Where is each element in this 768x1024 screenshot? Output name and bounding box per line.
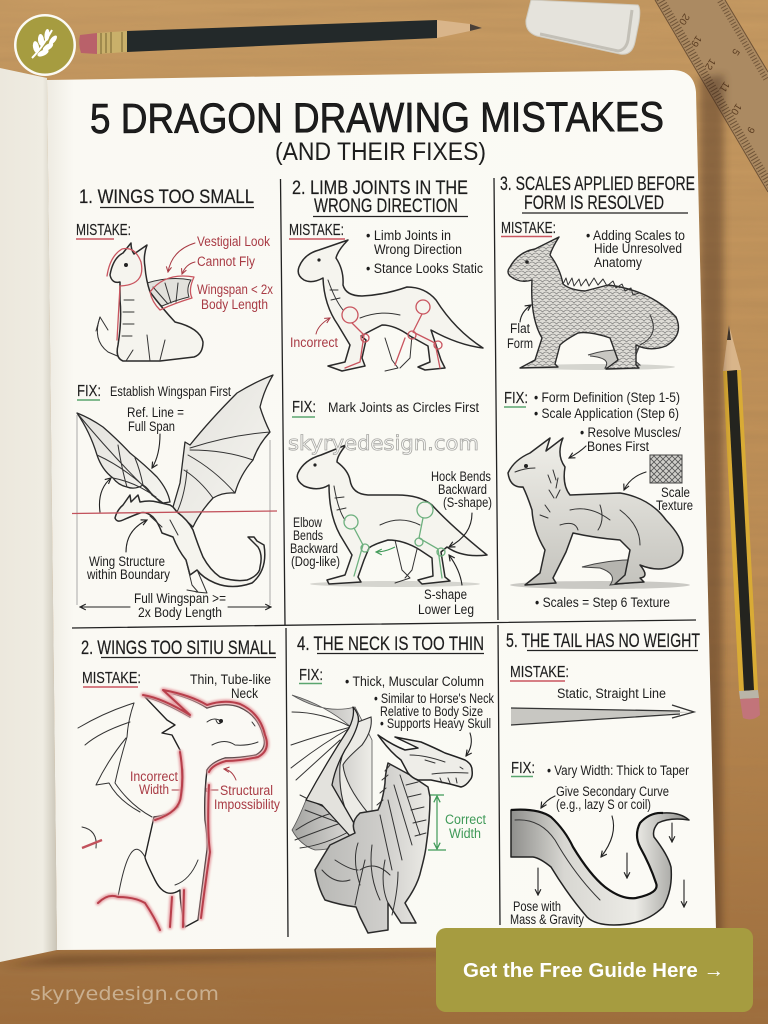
fix label: FIX: (511, 760, 535, 777)
fix labels (290, 400, 492, 617)
thin-neck dragon (78, 690, 267, 930)
fix bullets: • Thick, Muscular Column (345, 674, 484, 689)
mistake bullets: Flat (510, 321, 530, 336)
mistake bullets: Anatomy (594, 255, 642, 270)
ruler (655, 0, 768, 192)
scale texture swatch (650, 455, 682, 483)
ruler: 19 (688, 33, 703, 49)
flying dragon (72, 375, 277, 605)
fix bullets: (e.g., lazy S or coil) (556, 797, 651, 812)
fix label: FIX: (292, 399, 316, 416)
call to action button: Get the Free Guide Here → (463, 960, 724, 982)
neck labels: Thin, Tube-like (190, 672, 271, 687)
fix labels: Full Wingspan >= (134, 591, 226, 606)
neck labels: Width (139, 782, 169, 797)
panel: 2 fix (290, 399, 492, 617)
mistake label: MISTAKE: (510, 664, 569, 681)
fix labels: Backward (438, 482, 487, 497)
ruler: 5 (729, 46, 741, 57)
fix bullets: • Similar to Horse's Neck (374, 691, 494, 706)
correct width bracket (428, 795, 446, 850)
gravity arrows (538, 823, 684, 907)
heading: 5. THE TAIL HAS NO WEIGHT (506, 631, 700, 652)
mistake bullets: • Adding Scales to (586, 228, 685, 243)
heading: 2. LIMB JOINTS IN THE (292, 178, 468, 199)
eraser (526, 0, 640, 54)
red callouts (168, 234, 273, 312)
heading (292, 178, 468, 217)
side dragon with red joints (298, 240, 483, 371)
fix bullets: Pose with (513, 899, 561, 914)
fix labels: Lower Leg (418, 602, 474, 617)
panel: the tail has no weight (506, 631, 700, 927)
fix bullets: • Form Definition (Step 1-5) (534, 390, 680, 405)
panel: the neck is too thin (291, 634, 494, 933)
panel: 2 limb joints (289, 178, 483, 371)
heading: 2. WINGS TOO SITIU SMALL (81, 638, 276, 659)
fix bullets: • Scales = Step 6 Texture (535, 595, 670, 610)
mistake bullets: • Limb Joints in (366, 228, 451, 243)
red callouts: Vestigial Look (197, 234, 270, 249)
fix bullets: • Supports Heavy Skull (380, 716, 491, 731)
title: 5 DRAGON DRAWING MISTAKES (90, 93, 664, 142)
fix labels: (S-shape) (443, 495, 492, 510)
fix labels: S-shape (424, 587, 467, 602)
watermark: centre: skyryedesign.com (288, 431, 479, 455)
ruler: 12 (702, 56, 717, 72)
heading: WRONG DIRECTION (314, 196, 458, 217)
grid dividers (72, 178, 696, 937)
heading: 3. SCALES APPLIED BEFORE (500, 174, 695, 195)
neck labels: Neck (231, 686, 258, 701)
fix bullets (534, 390, 693, 610)
fix bullets (510, 763, 689, 927)
mistake bullets: Form (507, 336, 533, 351)
fix bullets: Correct (445, 812, 486, 827)
left wing (77, 413, 170, 503)
heading (500, 174, 695, 214)
mistake label: MISTAKE: (289, 222, 344, 239)
neck labels: Structural (220, 783, 273, 798)
fix label: FIX: (77, 383, 101, 400)
fix bullets: Mass & Gravity (510, 912, 584, 927)
fix labels: within Boundary (86, 567, 170, 582)
mistake bullets (507, 228, 685, 351)
subtitle: (AND THEIR FIXES) (275, 138, 486, 166)
wing membrane (291, 695, 372, 850)
fix labels: Elbow (293, 515, 322, 530)
fix labels: Wing Structure (89, 554, 165, 569)
red callouts: Wingspan < 2x (197, 282, 273, 297)
right wing (173, 375, 273, 527)
mistake bullets: • Stance Looks Static (366, 261, 483, 276)
ruler: 20 (676, 11, 691, 27)
panel: 3 scales (500, 174, 695, 370)
side dragon with green joints (297, 445, 487, 587)
red callouts: Cannot Fly (197, 254, 255, 269)
mistake bullets: Hide Unresolved (594, 241, 682, 256)
fix bullets: • Resolve Muscles/ (580, 425, 681, 440)
left notebook sheet (0, 68, 57, 962)
head (378, 735, 472, 787)
mistake label: MISTAKE: (76, 222, 131, 239)
fix labels: Mark Joints as Circles First (328, 400, 479, 415)
panel: 1 fix (72, 375, 277, 620)
fix bullets: Scale (661, 485, 690, 500)
watermark: bottom: skyryedesign.com (30, 983, 219, 1005)
fix label: FIX: (299, 667, 323, 684)
mistake bullets: Incorrect (290, 335, 338, 350)
S-curve tail (511, 810, 689, 925)
fix label: FIX: (504, 390, 528, 407)
pencil: right (723, 325, 760, 719)
heading: 1. WINGS TOO SMALL (79, 187, 254, 208)
static label: Static, Straight Line (557, 686, 666, 701)
arrows (80, 434, 271, 607)
muscular neck dragon (291, 695, 472, 933)
fix bullets: Width (449, 826, 481, 841)
fix labels: (Dog-like) (291, 554, 340, 569)
panel: wings too small (lower) (78, 638, 280, 930)
neck labels (130, 672, 280, 812)
ruler: 11 (716, 79, 731, 94)
sitting dragon (96, 243, 203, 361)
fix labels (86, 384, 231, 620)
fix bullets: Bones First (587, 439, 649, 454)
mistake label: MISTAKE: (501, 220, 556, 237)
heading: FORM IS RESOLVED (524, 193, 664, 214)
fix bullets: Give Secondary Curve (556, 784, 669, 799)
fix labels: Ref. Line = (127, 405, 184, 420)
panel: 3 fix (504, 390, 693, 610)
fix bullets: Texture (656, 498, 693, 513)
mistake bullets: Wrong Direction (374, 242, 462, 257)
fix labels: 2x Body Length (138, 605, 222, 620)
fix bullets (345, 674, 494, 841)
fix bullets: • Scale Application (Step 6) (534, 406, 679, 421)
fix bullets: Relative to Body Size (380, 704, 483, 719)
pencil: top (79, 20, 482, 54)
ruler: 10 (728, 101, 743, 117)
ruler: 9 (744, 124, 756, 135)
mistake bullets (290, 228, 483, 350)
neck labels: Incorrect (130, 769, 178, 784)
muscular dragon (508, 438, 690, 589)
badge: logo (14, 14, 76, 76)
panel: 1 wings too small (76, 187, 273, 361)
straight tail arrow (511, 705, 694, 725)
heading: 4. THE NECK IS TOO THIN (297, 634, 484, 655)
fix labels: Backward (290, 541, 338, 556)
mistake label: MISTAKE: (82, 670, 141, 687)
red callouts: Body Length (201, 297, 268, 312)
neck labels: Impossibility (214, 797, 280, 812)
fix bullets: • Vary Width: Thick to Taper (547, 763, 689, 778)
call to action button (436, 928, 753, 1012)
fix labels: Full Span (128, 419, 175, 434)
fix labels: Bends (293, 528, 323, 543)
scaly dragon (508, 237, 678, 370)
fix labels: Hock Bends (431, 469, 491, 484)
arrows (376, 513, 472, 585)
fix labels: Establish Wingspan First (110, 384, 231, 399)
body (315, 763, 430, 933)
notebook page (47, 70, 716, 950)
